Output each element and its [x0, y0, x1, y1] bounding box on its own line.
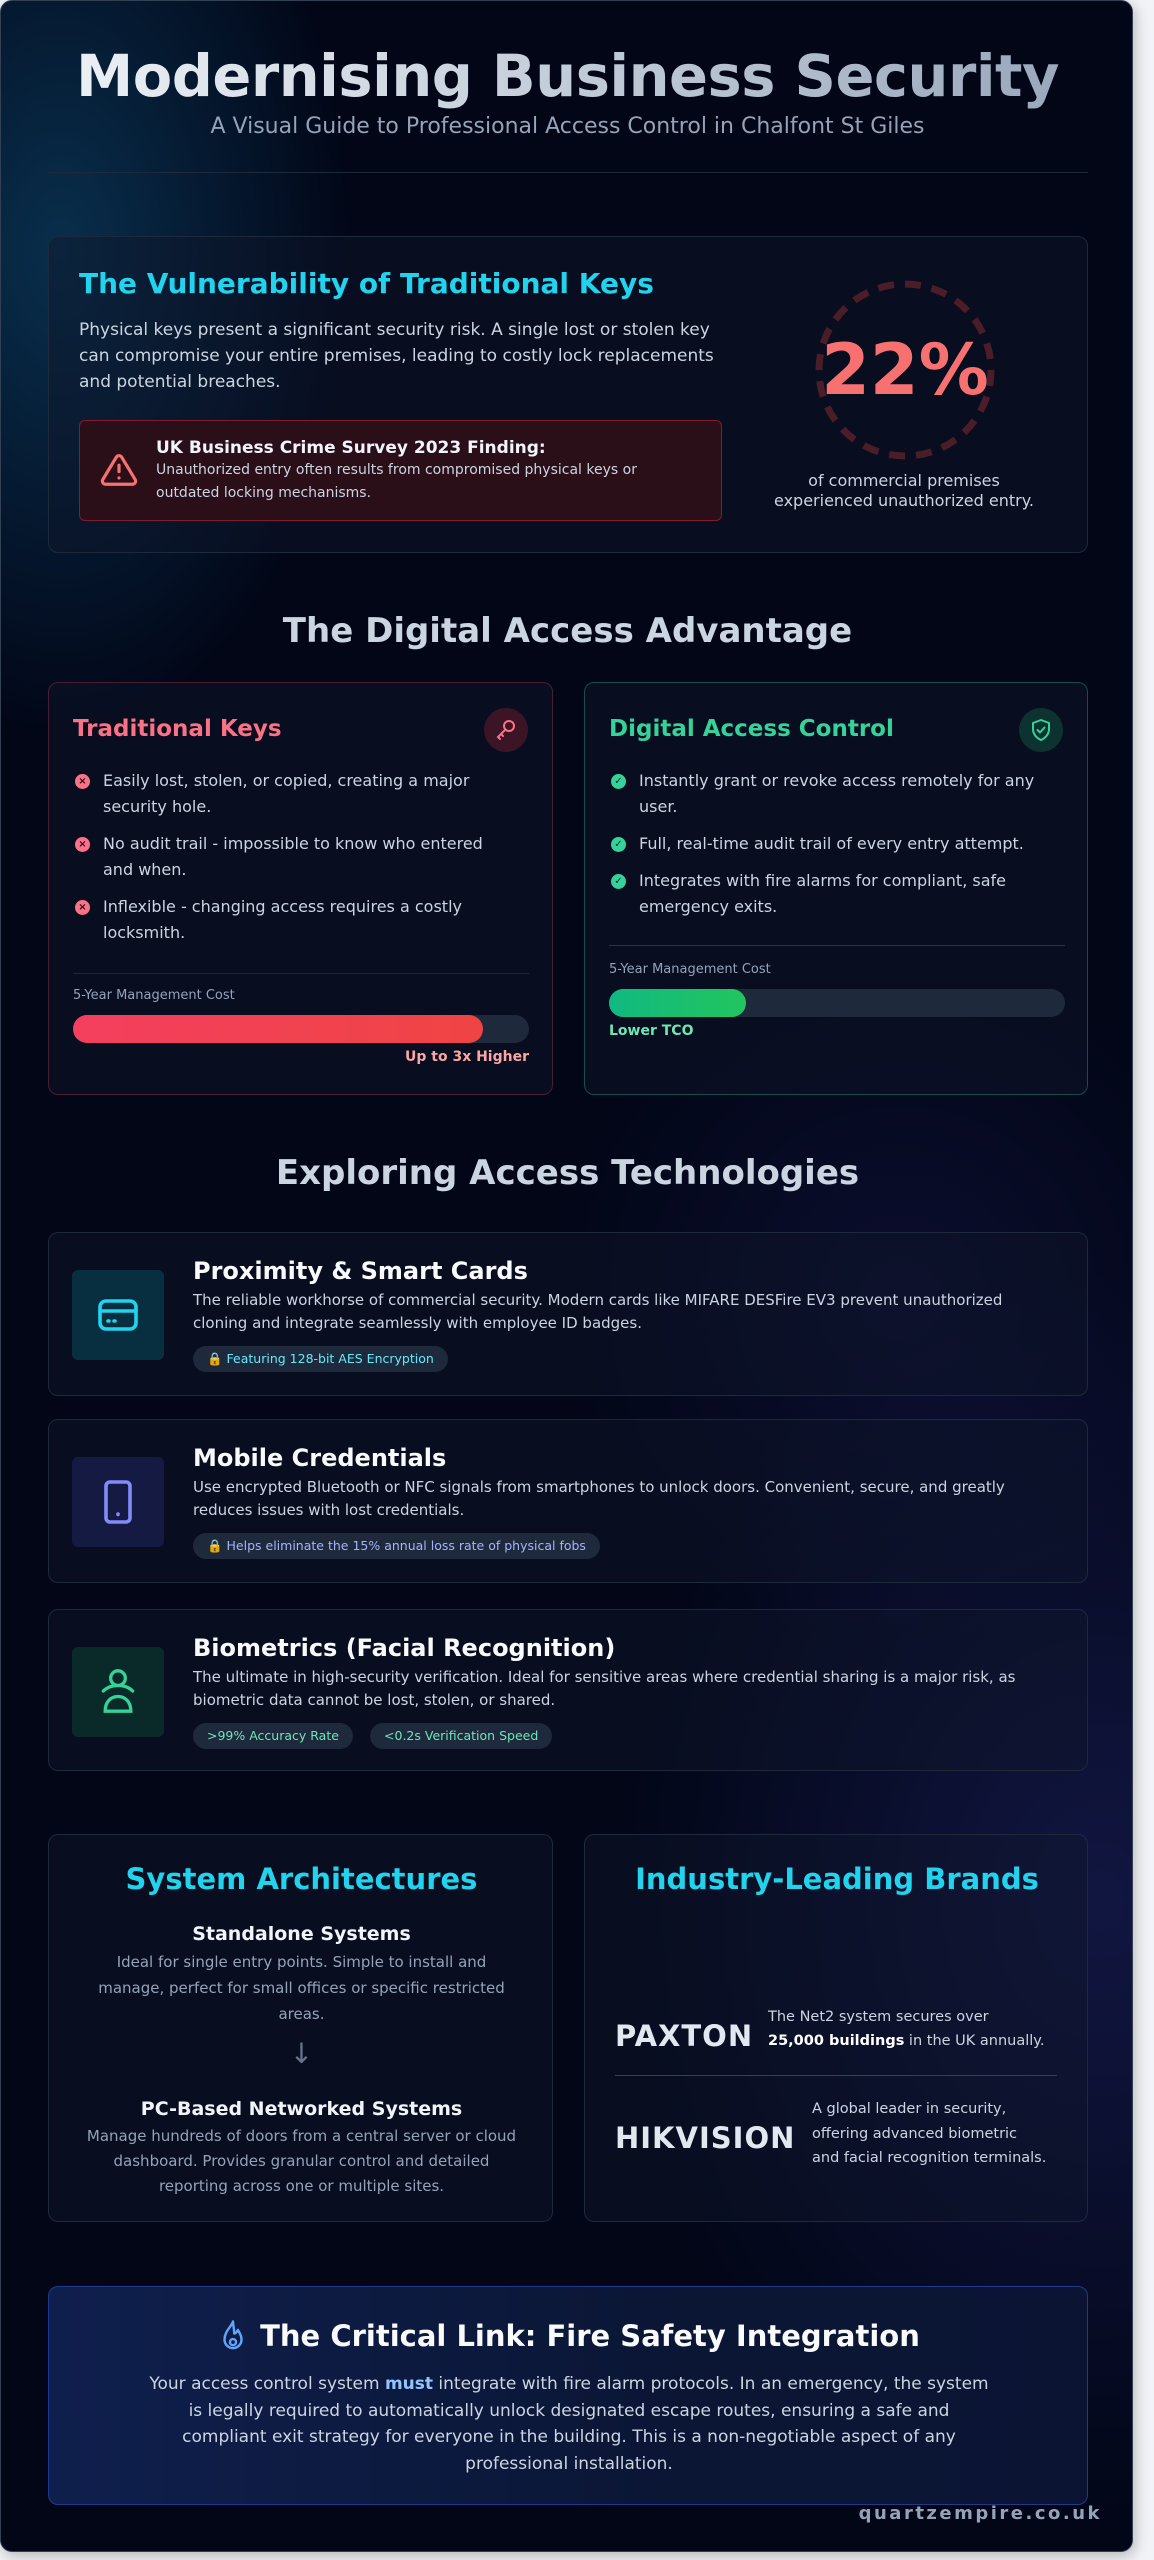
pills: biometric stats: <0.2s Verification Speed	[384, 1728, 538, 1743]
subtitle: A Visual Guide to Professional Access Control in Chalfont St Giles	[210, 114, 924, 139]
text: fire safety body: compliant exit strategy for everyone in the building. This is a non-negotiable aspect of any	[182, 2427, 956, 2447]
chart: 22% stat circle	[816, 280, 994, 460]
heading: system architectures: System Architectures	[126, 1862, 477, 1896]
list: digital benefits: Integrates with fire alarms for compliant, safe emergency exits.	[639, 871, 1006, 916]
icon: flame	[223, 2320, 243, 2350]
text: proximity: The reliable workhorse of commercial security. Modern cards like MIFARE DESFire EV3 prevent unauthorized	[193, 1291, 1002, 1309]
heading: traditional keys: Traditional Keys	[73, 716, 282, 742]
brand: hikvision	[615, 2101, 1046, 2166]
list: traditional drawbacks: and when.	[103, 860, 186, 879]
bar chart: digital cost: 5-Year Management Cost	[609, 962, 771, 977]
brand: hikvision: A global leader in security,	[812, 2101, 1006, 2117]
text: networked: reporting across one or multiple sites.	[159, 2177, 444, 2195]
list: traditional drawbacks: ×	[78, 902, 87, 913]
heading: digital access advantage: The Digital Access Advantage	[283, 611, 852, 651]
pill: loss rate: 🔒 Helps eliminate the 15% annual loss rate of physical fobs	[207, 1538, 586, 1553]
panel: proximity cards	[48, 1232, 1088, 1396]
chart: 22% stat circle: 22%	[821, 329, 989, 411]
text: mobile: Use encrypted Bluetooth or NFC signals from smartphones to unlock doors. Convenient, secure, and greatly	[193, 1478, 1005, 1496]
title: Modernising Business Security	[76, 43, 1059, 110]
text: fire safety body: is legally required to automatically unlock designated escape routes, ensuring a safe and	[189, 2400, 949, 2420]
text: fire safety body	[149, 2374, 989, 2474]
list: traditional drawbacks: Easily lost, stolen, or copied, creating a major security hole.	[103, 771, 469, 816]
pill: encryption	[193, 1346, 448, 1372]
text: survey finding: UK Business Crime Survey 2023 Finding:	[156, 438, 546, 458]
text: stat caption: experienced unauthorized entry.	[774, 491, 1034, 510]
brand: hikvision: offering advanced biometric	[812, 2126, 1017, 2142]
text: survey finding: Unauthorized entry often results from compromised physical keys or	[156, 462, 637, 478]
list: traditional drawbacks: Inflexible - changing access requires a costly locksmith.	[103, 897, 462, 942]
icon: person	[72, 1647, 164, 1737]
brand: hikvision: HIKVISION	[615, 2121, 795, 2155]
pill: loss rate	[193, 1533, 600, 1559]
icon: shield	[1019, 708, 1063, 752]
list: traditional drawbacks: No audit trail - impossible to know who entered	[103, 834, 483, 853]
list: digital benefits: Full, real-time audit trail of every entry attempt.	[639, 834, 1024, 853]
panel: digital access control	[584, 682, 1088, 1095]
brand: paxton: PAXTON	[615, 2019, 753, 2053]
icon: warning	[100, 454, 138, 486]
text: fire safety body: Your access control system must integrate with fire alarm protocols. In an emergency, the system	[149, 2374, 989, 2394]
list: digital benefits: Instantly grant or revoke access remotely for any user.	[639, 771, 1034, 816]
list: traditional drawbacks: ×	[78, 839, 87, 850]
brand: paxton: 25,000 buildings in the UK annually.	[768, 2033, 1044, 2049]
icon: phone	[72, 1457, 164, 1547]
text: biometrics	[192, 1634, 1015, 1749]
list: digital benefits: ✓	[614, 876, 623, 887]
text: biometrics: biometric data cannot be lost, stolen, or shared.	[193, 1691, 555, 1709]
panel: mobile credentials	[48, 1419, 1088, 1583]
panel: biometrics	[48, 1609, 1088, 1771]
panel: traditional keys	[48, 682, 553, 1095]
text: mobile	[193, 1444, 1005, 1559]
text: biometrics: The ultimate in high-security verification. Ideal for sensitive areas where credential sharing is a major risk, as	[193, 1668, 1015, 1686]
text: standalone: Standalone Systems	[192, 1923, 411, 1945]
heading: brands: Industry-Leading Brands	[635, 1862, 1039, 1896]
list: digital benefits: ✓	[614, 776, 623, 787]
list: digital benefits: ✓	[614, 839, 623, 850]
text: proximity: cloning and integrate seamlessly with employee ID badges.	[193, 1314, 642, 1332]
bar chart: traditional cost	[73, 988, 529, 1065]
text: proximity: Proximity & Smart Cards	[193, 1257, 528, 1285]
text: survey finding	[156, 438, 637, 501]
text: mobile: Mobile Credentials	[193, 1444, 446, 1472]
callout: crime survey	[79, 420, 722, 521]
bar chart: digital cost: Lower TCO	[609, 1023, 693, 1039]
text: stat caption: of commercial premises	[808, 471, 1000, 490]
bar chart: traditional cost: Up to 3x Higher	[405, 1049, 529, 1065]
panel: vulnerability	[48, 236, 1088, 553]
text: networked: dashboard. Provides granular control and detailed	[114, 2152, 489, 2170]
footer: site: quartzempire.co.uk	[859, 2503, 1102, 2524]
brand: paxton: The Net2 system secures over	[768, 2009, 989, 2025]
list: traditional drawbacks: ×	[78, 776, 87, 787]
text: standalone: manage, perfect for small offices or specific restricted	[98, 1979, 505, 1997]
arrow: down: ↓	[290, 2037, 313, 2070]
brand: hikvision: and facial recognition terminals.	[812, 2150, 1046, 2166]
text: biometrics: Biometrics (Facial Recognition)	[193, 1634, 615, 1662]
heading: fire safety: The Critical Link: Fire Safety Integration	[260, 2319, 920, 2353]
text: networked	[87, 2098, 516, 2195]
text: proximity	[192, 1257, 1002, 1372]
pills: biometric stats: >99% Accuracy Rate	[207, 1728, 339, 1743]
list: traditional drawbacks	[75, 771, 483, 942]
text: survey finding: outdated locking mechanisms.	[156, 485, 371, 501]
text: networked: PC-Based Networked Systems	[141, 2098, 462, 2120]
list: digital benefits	[611, 771, 1034, 916]
icon: card	[72, 1270, 164, 1360]
text: networked: Manage hundreds of doors from a central server or cloud	[87, 2127, 516, 2145]
text: fire safety body: professional installation.	[465, 2454, 673, 2474]
text: standalone: Ideal for single entry points. Simple to install and	[117, 1953, 486, 1971]
text: mobile: reduces issues with lost credentials.	[193, 1501, 464, 1519]
text: vulnerability paragraph: Physical keys present a significant security risk. A single lost or stolen key can compromise your entire premises, leading to costly lock replacements and potential breaches.	[79, 320, 714, 392]
panel: fire safety	[48, 2286, 1088, 2505]
heading: digital access control: Digital Access Control	[609, 716, 894, 742]
text: standalone: areas.	[278, 2005, 325, 2023]
panel: industry brands	[584, 1834, 1088, 2222]
heading: vulnerability: The Vulnerability of Traditional Keys	[79, 267, 654, 300]
bar chart: traditional cost: 5-Year Management Cost	[73, 988, 235, 1003]
heading: exploring access technologies: Exploring Access Technologies	[276, 1153, 859, 1193]
panel: system architectures	[48, 1834, 553, 2222]
icon: key	[484, 708, 528, 752]
pills: biometric stats	[193, 1723, 552, 1749]
text: standalone	[98, 1923, 505, 2023]
pill: encryption: 🔒 Featuring 128-bit AES Encryption	[207, 1351, 434, 1366]
brand: paxton	[615, 2009, 1044, 2053]
text: stat caption	[774, 471, 1034, 510]
bar chart: digital cost	[609, 962, 1065, 1039]
